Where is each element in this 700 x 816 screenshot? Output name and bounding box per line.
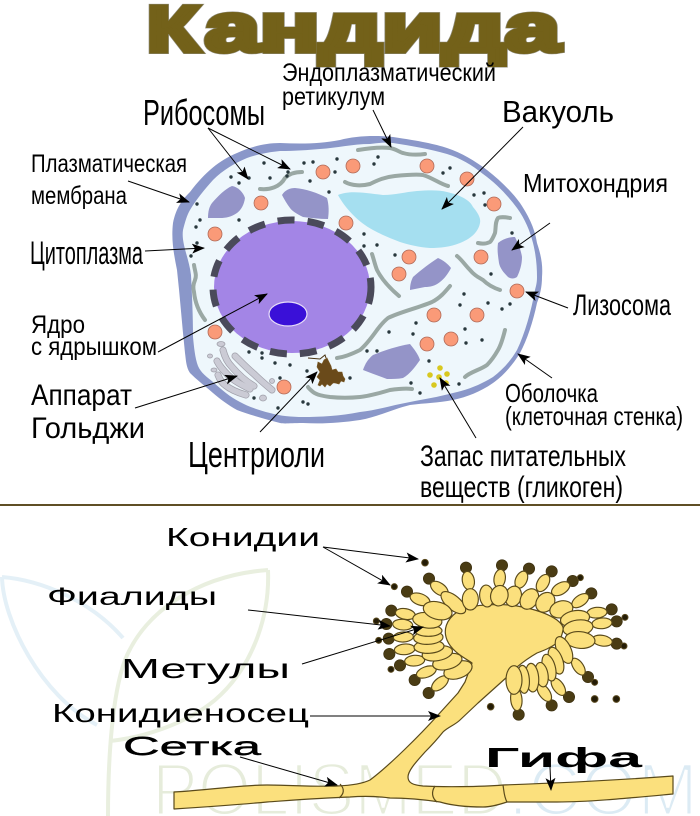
spores — [381, 560, 622, 720]
arrow: plasma membrane — [128, 181, 189, 202]
arrow: lysosome — [526, 292, 568, 308]
mitochondria — [208, 186, 522, 379]
label: golgi apparatus — [31, 379, 145, 445]
arrow: hypha — [550, 767, 551, 790]
arrow: centrioles — [260, 372, 317, 432]
vacuole — [338, 190, 480, 248]
title — [147, 0, 562, 66]
label: nucleus with nucleolus: с ядрышком — [31, 333, 157, 361]
panel: candida cell — [172, 136, 542, 423]
label: vacuole: Вакуоль — [502, 94, 614, 129]
label: golgi apparatus: Аппарат — [31, 379, 132, 412]
label: endoplasmic reticulum — [282, 59, 496, 111]
label: metulae: Метулы — [121, 653, 290, 684]
label: plasma membrane — [31, 150, 187, 210]
label: cytoplasm: Цитоплазма — [30, 235, 143, 271]
arrows: conidia — [323, 547, 418, 585]
label: cell wall — [505, 378, 683, 431]
golgi apparatus — [208, 342, 274, 401]
septa — [339, 784, 507, 802]
centrioles — [308, 355, 345, 387]
arrow: cell wall — [518, 354, 552, 378]
label: conidia: Конидии — [166, 522, 320, 552]
arrow: conidiophore — [310, 715, 440, 717]
panel: fungus conidiophore — [174, 559, 673, 809]
arrow: golgi apparatus — [135, 376, 237, 408]
label: hypha: Гифа — [485, 742, 643, 773]
label: nucleus with nucleolus: Ядро — [31, 311, 85, 339]
label: plasma membrane: мембрана — [31, 182, 127, 210]
label: centrioles: Центриоли — [188, 434, 325, 475]
label: phialides: Фиалиды — [47, 583, 217, 611]
cell wall — [172, 136, 542, 423]
arrow: vacuole — [442, 127, 523, 209]
watermark: polismed logo — [2, 570, 698, 816]
label: conidiophore: Конидиеносец — [52, 698, 309, 728]
label: mitochondrion: Митохондрия — [523, 168, 668, 198]
label: nucleus with nucleolus — [31, 311, 157, 361]
arrow: glycogen reserve — [440, 378, 476, 438]
label: septum: Сетка — [123, 731, 262, 761]
arrow: nucleus — [158, 294, 267, 352]
arrow: cytoplasm — [145, 248, 204, 251]
endoplasmic reticulum — [193, 148, 510, 398]
arrow: endoplasmic reticulum — [373, 110, 391, 147]
label: glycogen reserve: веществ (гликоген) — [420, 471, 623, 504]
label: golgi apparatus: Гольджи — [31, 412, 145, 445]
label: glycogen reserve: Запас питательных — [420, 440, 626, 473]
arrow: mitochondrion — [512, 223, 550, 250]
ribosomes — [189, 155, 514, 410]
cytoplasm — [183, 143, 537, 417]
label: glycogen reserve — [420, 440, 626, 504]
label: plasma membrane: Плазматическая — [31, 150, 187, 178]
conidial head — [373, 559, 628, 720]
label: ribosomes: Рибосомы — [143, 92, 265, 133]
glycogen granules — [427, 365, 450, 388]
label: endoplasmic reticulum: ретикулум — [282, 83, 385, 111]
arrow: septum — [240, 757, 337, 785]
arrow: metulae — [302, 627, 423, 664]
label: cell wall: Оболочка — [505, 378, 598, 408]
arrow: phialides — [248, 610, 390, 626]
metulae — [412, 583, 596, 694]
lysosomes — [208, 159, 524, 394]
nucleus — [213, 220, 371, 354]
phialides — [392, 569, 613, 711]
label: endoplasmic reticulum: Эндоплазматический — [282, 59, 496, 87]
arrows: ribosomes — [208, 128, 290, 179]
hypha and conidiophore body — [174, 605, 673, 809]
